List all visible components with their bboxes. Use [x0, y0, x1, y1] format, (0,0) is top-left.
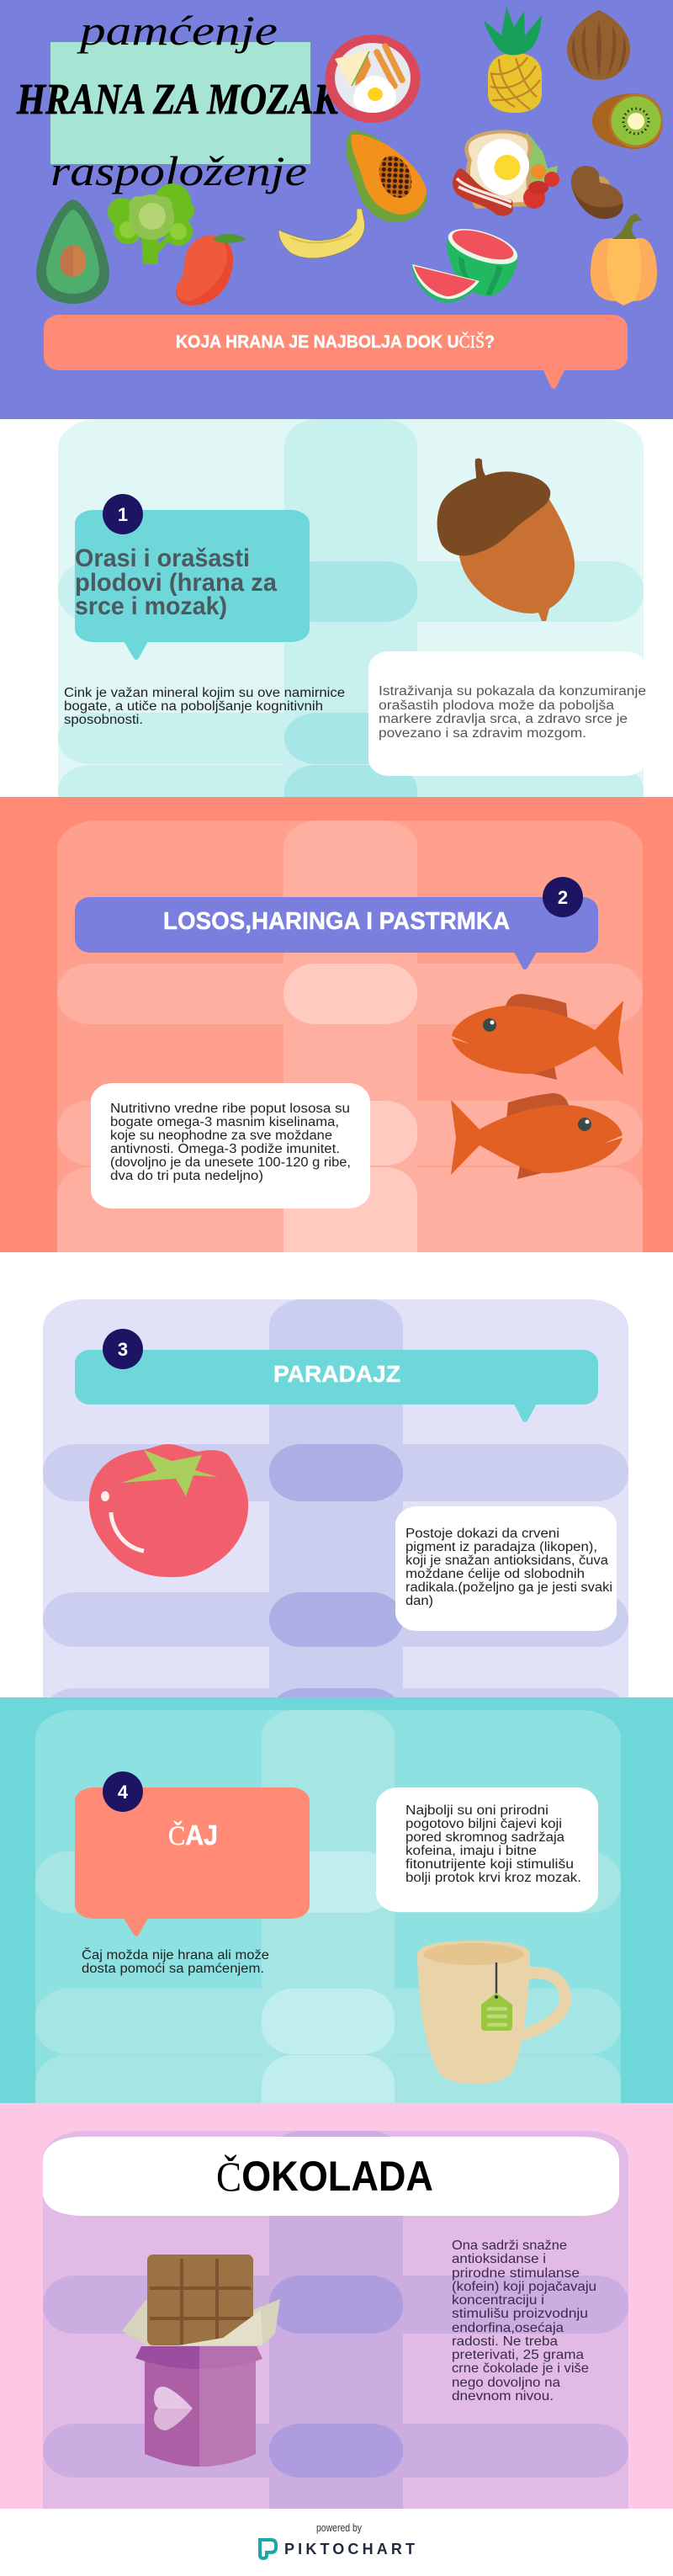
icon: tea mug — [417, 1941, 565, 2084]
icon: bean — [571, 166, 623, 219]
icon: chocolate bar — [122, 2255, 280, 2467]
number badge 1 — [103, 494, 143, 534]
text: zinc note — [64, 686, 345, 727]
heading: nuts: srce i mozak) — [75, 592, 227, 620]
text: chocolate benefits: (kofein) koji pojačavaju — [452, 2280, 596, 2294]
icon: banana — [278, 209, 364, 258]
callout: fish nutrition: koje su neophodne za sve moždane — [110, 1129, 332, 1143]
callout: herbal tea: pogotovo biljni čajevi koji — [405, 1817, 562, 1831]
heading: tea: ČAJ — [168, 1819, 218, 1851]
header background — [0, 0, 673, 419]
number badge 2: 2 — [558, 887, 568, 908]
icon: watermelon — [411, 222, 522, 303]
callout: herbal tea: bolji protok krvi kroz mozak. — [405, 1871, 581, 1885]
section 5 background — [0, 2103, 673, 2509]
banner: question — [44, 315, 628, 389]
text: tea note — [82, 1948, 269, 1976]
title block — [16, 7, 341, 194]
number badge 4: 4 — [118, 1782, 129, 1803]
footer background — [0, 2509, 673, 2576]
text: chocolate benefits: radosti. Ne treba — [452, 2334, 558, 2349]
icon: hazelnut — [567, 10, 630, 80]
callout: tomato lycopene: Postoje dokazi da crveni — [405, 1527, 559, 1541]
text: chocolate benefits: dnevnom nivou. — [452, 2389, 554, 2403]
text: chocolate benefits: nego dovoljno na — [452, 2376, 560, 2390]
footer: Piktochart credit: powered by — [316, 2522, 363, 2534]
text: chocolate benefits: Ona sadrži snažne — [452, 2239, 567, 2253]
icon: tomato — [89, 1444, 248, 1577]
text: chocolate benefits: crne čokolade je i više — [452, 2361, 589, 2376]
callout: nuts research: orašastih plodova može da poboljša — [379, 698, 614, 713]
callout: tomato lycopene: pigment iz paradajza (likopen), — [405, 1540, 597, 1554]
heading: fish: LOSOS,HARINGA I PASTRMKA — [163, 908, 510, 935]
text: zinc note: Cink je važan mineral kojim su ove namirnice — [64, 686, 345, 700]
callout: herbal tea: Najbolji su oni prirodni — [405, 1803, 548, 1818]
callout: herbal tea: fitonutrijente koji stimulišu — [405, 1857, 574, 1872]
number badge 3 — [103, 1329, 143, 1369]
callout: tomato lycopene: moždane ćelije od slobodnih — [405, 1567, 585, 1581]
icon: pineapple — [484, 7, 542, 113]
callout: herbal tea: pored skromnog sadržaja — [405, 1830, 564, 1845]
text: zinc note: sposobnosti. — [64, 713, 143, 727]
callout: nuts research: markere zdravlja srca, a zdravo srce je — [379, 712, 628, 726]
callout: nuts research: Istraživanja su pokazala da konzumiranje — [379, 684, 646, 698]
bubble: fish heading — [75, 897, 598, 969]
icon: mango — [176, 234, 246, 305]
title word: raspoloženje: raspoloženje — [50, 147, 307, 194]
bubble: nuts heading — [75, 510, 310, 660]
icon: breakfast plate — [325, 35, 421, 123]
text: chocolate benefits: stimulišu proizvodnju — [452, 2307, 588, 2321]
icon: egg toast with bacon — [453, 130, 559, 216]
callout: fish nutrition: bogate omega-3 masnim kiselinama, — [110, 1115, 339, 1129]
icon: avocado — [36, 199, 109, 304]
footer: Piktochart credit — [260, 2522, 415, 2558]
text: tea note: dosta pomoći sa pamćenjem. — [82, 1962, 264, 1976]
icon: fish right — [451, 1093, 623, 1179]
icon: broccoli — [108, 183, 194, 264]
panel: section 5 grid — [43, 2131, 628, 2509]
callout: fish nutrition: antivnosti. Omega-3 podiže imunitet. — [110, 1142, 340, 1156]
panel: section 3 grid — [43, 1299, 628, 1697]
icon: fish left — [452, 994, 623, 1080]
text: chocolate benefits: koncentraciju i — [452, 2293, 544, 2308]
callout: tomato lycopene: radikala.(poželjno ga je jesti svaki — [405, 1580, 612, 1595]
text: zinc note: bogate, a utiče na poboljšanje kognitivnih — [64, 699, 323, 714]
callout: tomato lycopene: dan) — [405, 1594, 433, 1608]
text: chocolate benefits: preterivati, 25 grama — [452, 2348, 584, 2362]
number badge 4 — [103, 1771, 143, 1812]
callout: fish nutrition: (dovoljno je da unesete 100-120 g ribe, — [110, 1155, 351, 1170]
wordmark: PIKTOCHART — [284, 2541, 415, 2557]
callout: nuts research — [368, 651, 646, 776]
title backdrop — [50, 42, 310, 164]
panel: section 4 grid — [35, 1710, 621, 2103]
section 1 background — [0, 419, 673, 797]
panel: section 2 grid — [57, 821, 643, 1300]
section 2 background — [0, 797, 673, 1252]
icon: orange pepper — [591, 214, 657, 305]
text: chocolate benefits: antioksidanse i — [452, 2252, 546, 2266]
number badge 2 — [543, 877, 583, 917]
callout: herbal tea — [376, 1787, 598, 1912]
icon: Piktochart logo — [260, 2540, 276, 2558]
icon: papaya — [346, 130, 427, 222]
text: chocolate benefits: prirodne stimulanse — [452, 2266, 580, 2281]
text: tea note: Čaj možda nije hrana ali može — [82, 1948, 269, 1963]
panel: section 1 grid — [58, 419, 644, 797]
title: HRANA ZA MOZAK: HRANA ZA MOZAK — [16, 76, 341, 124]
banner text: KOJA HRANA JE NAJBOLJA DOK UČIŠ? — [176, 332, 495, 352]
icon: acorn — [437, 459, 575, 621]
banner: chocolate heading — [43, 2137, 619, 2216]
callout: herbal tea: kofeina, imaju i bitne — [405, 1844, 537, 1858]
number badge 3: 3 — [118, 1339, 128, 1360]
callout: nuts research: povezano i sa zdravim mozgom. — [379, 726, 586, 741]
text: chocolate benefits — [452, 2239, 596, 2403]
callout: fish nutrition — [91, 1083, 370, 1208]
heading: tomato: PARADAJZ — [273, 1361, 400, 1387]
heading: chocolate: ČOKOLADA — [216, 2153, 433, 2200]
section 3 background — [0, 1252, 673, 1697]
bubble: tea heading — [75, 1787, 310, 1936]
callout: fish nutrition: dva do tri puta nedeljno) — [110, 1169, 263, 1183]
callout: tomato lycopene — [395, 1506, 617, 1631]
text: chocolate benefits: endorfina,osećaja — [452, 2321, 564, 2335]
title word: pamćenje: pamćenje — [77, 7, 278, 54]
number badge 1: 1 — [118, 504, 128, 525]
section 4 background — [0, 1697, 673, 2103]
icon: kiwi — [592, 93, 663, 149]
heading: nuts — [75, 544, 277, 620]
bubble: tomato heading — [75, 1350, 598, 1422]
callout: fish nutrition: Nutritivno vredne ribe poput lososa su — [110, 1102, 350, 1116]
callout: tomato lycopene: koji je snažan antioksidans, čuva — [405, 1554, 608, 1568]
heading: nuts: Orasi i orašasti — [75, 544, 250, 572]
heading: nuts: plodovi (hrana za — [75, 569, 277, 597]
